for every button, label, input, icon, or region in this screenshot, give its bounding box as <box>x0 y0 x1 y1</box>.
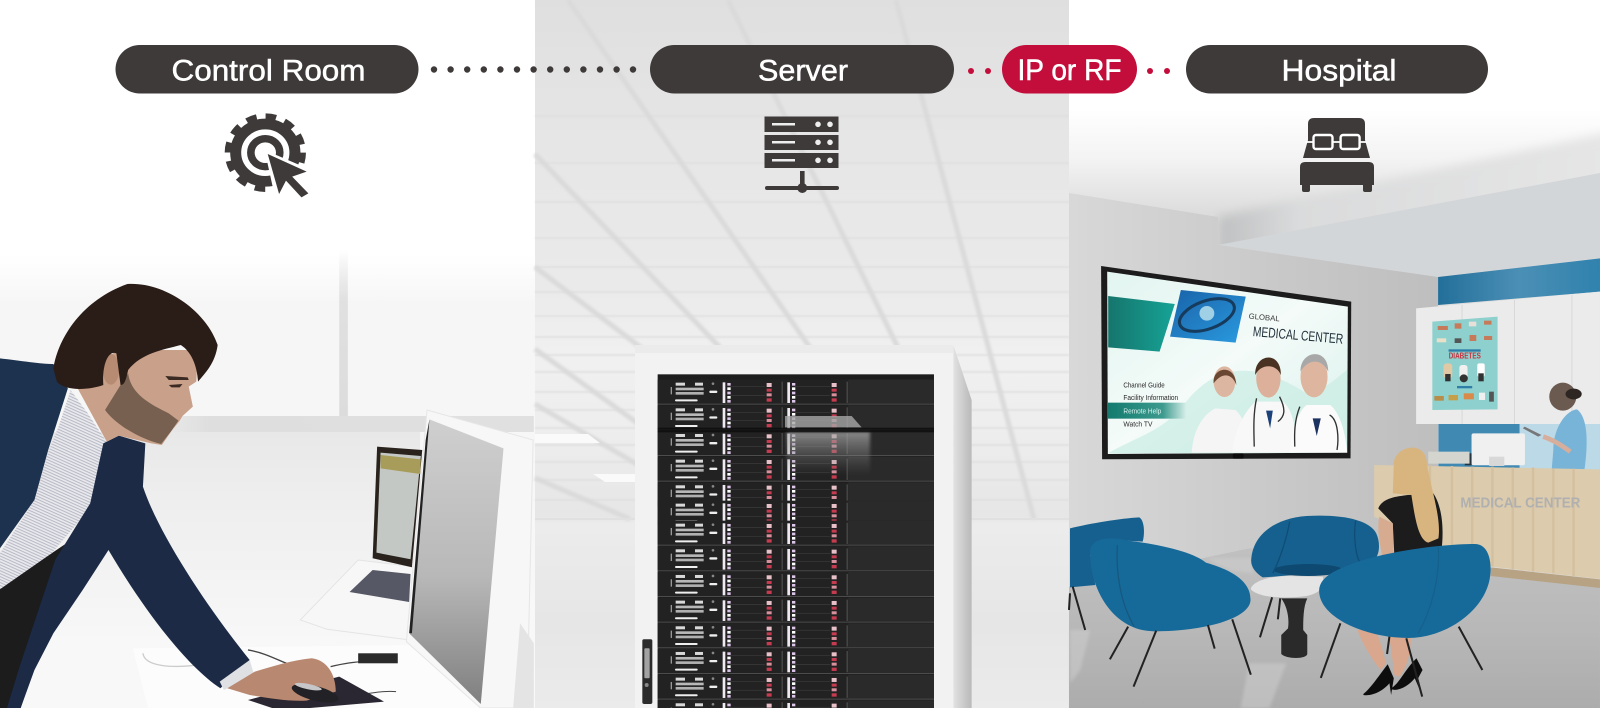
menu items <box>1123 380 1178 429</box>
panel: server <box>535 0 1069 708</box>
doctor: woman <box>1192 366 1251 453</box>
menu items: Watch TV <box>1123 420 1153 429</box>
reception monitor <box>1465 433 1525 466</box>
server background <box>535 0 1069 708</box>
monitor <box>406 410 534 708</box>
poster heading: DIABETES <box>1449 350 1481 360</box>
center armchair <box>1251 516 1379 637</box>
menu highlight <box>1108 403 1186 419</box>
doctor: right man <box>1290 354 1347 453</box>
panel: control room <box>0 0 535 708</box>
soffit underside <box>1218 173 1600 277</box>
label: Hospital <box>1186 45 1488 94</box>
TV screen <box>1107 272 1348 454</box>
blue band lower <box>1438 423 1600 477</box>
man: hand <box>227 658 336 701</box>
floor line <box>535 518 1069 520</box>
GLOBAL text: GLOBAL <box>1248 312 1281 323</box>
connector: red dots server to IP or RF <box>968 68 991 74</box>
man: ear <box>103 354 119 385</box>
label: IP or RF <box>1002 45 1137 94</box>
label: Server: Server <box>758 54 848 88</box>
floor <box>1069 548 1600 708</box>
wall poster <box>1432 317 1498 410</box>
teal banner <box>1108 296 1175 352</box>
icon: gear with cursor <box>229 117 320 203</box>
laptop <box>300 447 422 640</box>
window frame <box>0 250 534 645</box>
server rack <box>635 345 972 708</box>
man: dark inner clothing <box>0 530 90 708</box>
connector: dotted line control room to server <box>431 66 636 73</box>
front-left armchair <box>1090 539 1251 687</box>
man: jacket right and sleeve <box>7 436 250 708</box>
icon: server stack <box>764 116 839 193</box>
wall TV <box>1101 266 1351 459</box>
menu items: Channel Guide <box>1123 380 1165 389</box>
seated woman <box>1357 448 1443 697</box>
desk <box>133 645 482 708</box>
MEDICAL CENTER text: MEDICAL CENTER <box>1252 323 1344 347</box>
rack side <box>953 345 972 708</box>
ceiling beams <box>535 0 1034 519</box>
coffee table <box>1251 576 1323 658</box>
hospital room scene <box>1069 193 1600 617</box>
control room photo <box>0 250 534 708</box>
reception desk sign: MEDICAL CENTER <box>1460 494 1580 511</box>
man: eye and brow <box>165 376 189 387</box>
white cabinets <box>1416 292 1600 424</box>
rack units <box>658 380 934 708</box>
receptionist <box>1523 383 1587 470</box>
label: Control Room <box>116 45 418 94</box>
TV logo <box>1233 453 1244 459</box>
man: neck and face <box>76 350 198 445</box>
screen wave <box>1108 370 1347 453</box>
panel: hospital <box>1069 0 1600 708</box>
binders <box>1428 452 1470 464</box>
label: Server <box>650 45 954 94</box>
man: shirt cuff <box>220 660 254 690</box>
man: hair <box>53 284 218 389</box>
icon: hospital bed <box>1300 118 1374 192</box>
blue band upper <box>1438 258 1600 305</box>
door handle <box>642 639 652 704</box>
rack door <box>635 345 953 708</box>
computer mouse <box>290 680 340 706</box>
front-right armchair <box>1319 544 1491 697</box>
label: Control Room: Control Room <box>172 54 366 88</box>
poster figures <box>1434 363 1494 402</box>
control room background <box>0 0 535 708</box>
mouse pad <box>248 677 384 708</box>
connector: red dots IP or RF to hospital <box>1147 68 1170 74</box>
man: jacket left <box>0 358 68 548</box>
hospital background <box>1069 0 1600 708</box>
cables and stand <box>143 650 398 695</box>
man: shirt <box>0 390 107 589</box>
rack glass <box>658 374 934 708</box>
TV bezel <box>1101 266 1351 459</box>
wall <box>1069 193 1438 617</box>
hospital lower scene <box>1069 448 1600 708</box>
menu items: Facility Information <box>1123 393 1178 402</box>
reception desk <box>1374 465 1600 588</box>
menu items: Remote Help <box>1123 407 1161 416</box>
doctor: middle man <box>1232 357 1296 453</box>
label: Hospital: Hospital <box>1282 54 1396 88</box>
stethoscope card <box>1170 290 1246 343</box>
label: IP or RF: IP or RF <box>1018 54 1122 87</box>
man: beard <box>105 373 178 444</box>
reflection on glass <box>658 416 934 475</box>
ceiling light fixtures <box>535 434 636 482</box>
ceiling tile rows <box>535 116 1069 500</box>
soffit vertical face <box>1218 130 1600 260</box>
floor reflections <box>1070 558 1286 708</box>
far-left armchair <box>1069 517 1144 630</box>
